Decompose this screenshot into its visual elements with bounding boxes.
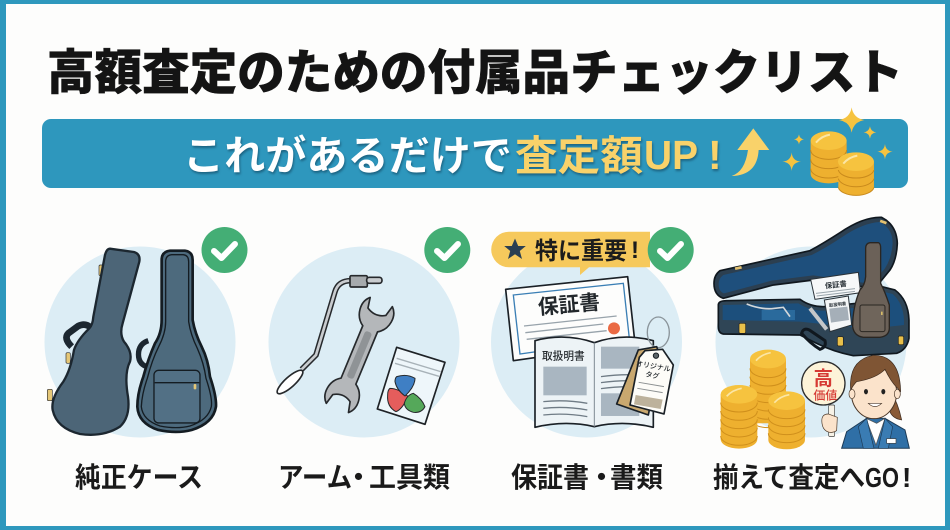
label: アーム xyxy=(278,462,352,493)
icon: open guitar case with accessories: 保証書 xyxy=(824,279,847,291)
banner text: ! xyxy=(708,132,722,178)
label: ・ xyxy=(587,462,616,493)
label: 工具類 xyxy=(369,462,450,493)
label: 揃えて査定へ xyxy=(713,462,865,493)
callout: especially important xyxy=(491,232,650,275)
icon: hard case and gig bag xyxy=(47,249,216,435)
icon: warranty card, manual and tag: 保証書 xyxy=(537,291,601,319)
icon: appraiser with high price sign: 価値 xyxy=(813,388,837,403)
background circle xyxy=(491,246,682,438)
banner text: これがあるだけで xyxy=(183,133,512,179)
icon: appraiser with high price sign xyxy=(802,355,909,448)
label: 保証書 xyxy=(511,462,589,493)
panel: warranty and documents xyxy=(491,227,694,493)
label: GO xyxy=(865,462,899,493)
icon: warranty card, manual and tag xyxy=(506,277,673,427)
icon: warranty card, manual and tag: 取扱明書 xyxy=(542,349,585,362)
icon: warranty card, manual and tag: オリジナル xyxy=(635,360,671,374)
background circle xyxy=(268,246,460,438)
callout: especially important: 特に重要 xyxy=(535,238,627,265)
icon: up arrow xyxy=(732,128,769,176)
check badge xyxy=(202,227,248,273)
background circle xyxy=(716,246,906,438)
banner text: UP xyxy=(644,132,698,178)
icon: open guitar case with accessories xyxy=(714,217,909,356)
icon: appraiser with high price sign: 高 xyxy=(814,367,833,390)
panel: arm and tools xyxy=(268,227,470,493)
icon: tremolo arm, wrench and pick bag xyxy=(274,276,445,424)
banner text xyxy=(183,132,722,179)
panel: bring everything xyxy=(713,217,911,493)
check badge xyxy=(648,227,694,273)
icon: coin stacks xyxy=(721,350,805,449)
label: ・ xyxy=(344,462,373,493)
panel: original case xyxy=(44,227,248,493)
label: 書類 xyxy=(610,462,663,493)
check badge xyxy=(424,227,470,273)
background circle xyxy=(44,246,236,438)
label xyxy=(511,462,663,493)
icon: open guitar case with accessories: 取扱明書 xyxy=(829,300,847,309)
icon: warranty card, manual and tag: タグ xyxy=(645,370,660,381)
banner xyxy=(42,107,908,195)
title: 高額査定のための付属品チェックリスト xyxy=(47,47,903,100)
banner text: 査定額 xyxy=(515,133,643,179)
label: ! xyxy=(902,462,911,493)
label: 純正ケース xyxy=(75,462,203,493)
callout: especially important: ! xyxy=(631,237,639,264)
label xyxy=(278,462,450,493)
icon: coins and sparkles xyxy=(782,107,893,195)
